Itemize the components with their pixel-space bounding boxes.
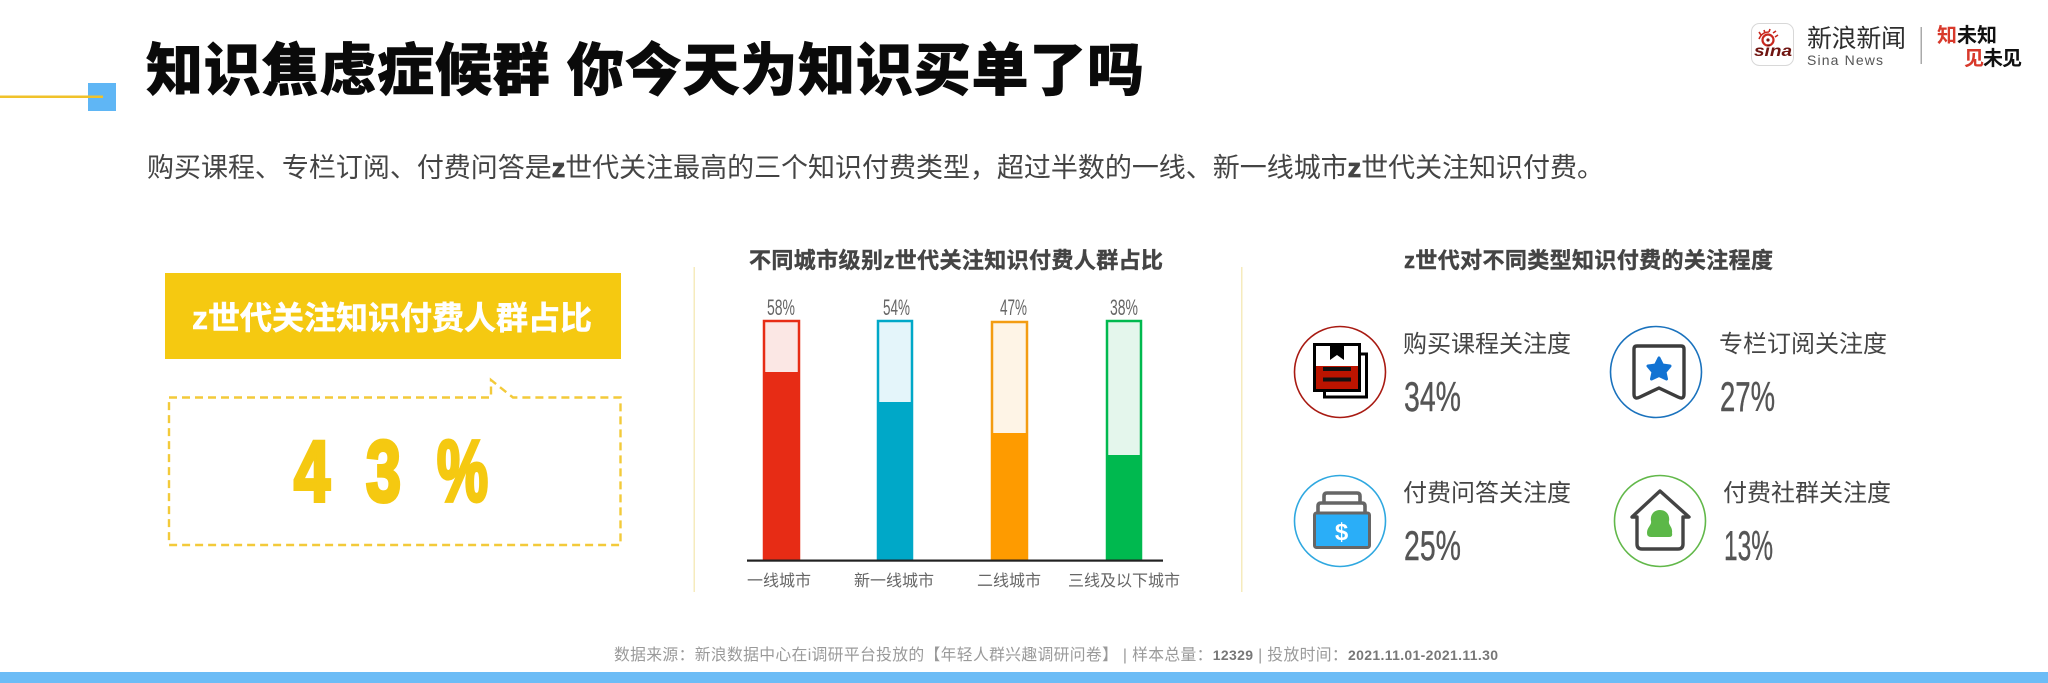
icon: sina app logo: sina [1754,43,1792,60]
header accent: blue square and yellow line [0,83,116,111]
item: courses 34%: 购买课程关注度 [1403,331,1571,358]
item: columns 27%: 专栏订阅关注度 [1719,331,1887,358]
item: paid Q&A 25% [1294,476,1571,569]
item: paid Q&A 25%: 付费问答关注度 [1403,480,1571,507]
icon: book stack [1294,326,1386,418]
brand english name: Sina News [1807,52,1883,68]
bar: tier three and below 38%: 三线及以下城市 [1068,572,1180,590]
bar: new tier one 54%: 54% [883,295,910,320]
heading banner: z世代关注知识付费人群占比 [192,300,592,336]
bar: tier two 47% [977,295,1041,590]
panel heading: z世代对不同类型知识付费的关注程度 [1404,248,1773,273]
subtitle text: 购买课程、专栏订阅、付费问答是z世代关注最高的三个知识付费类型，超过半数的一线、新一线城市z世代关注知识付费。 [147,153,1604,183]
logo: Sina News and slogan [1752,24,2022,70]
big number 43% [294,424,488,520]
bar: tier one 58% [747,295,811,590]
big number 43%: 4 [294,424,330,520]
slogan: 见未见 [1964,47,2022,70]
item: paid community 13%: 付费社群关注度 [1723,480,1891,507]
icon: sina app logo [1752,24,1794,66]
icon: bookmark star [1610,326,1702,418]
item: courses 34% [1294,326,1571,420]
bar: new tier one 54% [854,295,934,590]
bar: new tier one 54%: 新一线城市 [854,572,934,590]
slogan [1937,24,2022,70]
chart heading: 不同城市级别z世代关注知识付费人群占比 [749,248,1163,273]
heading banner [165,273,621,359]
icon: dollar card stack [1294,476,1386,566]
bar: tier three and below 38%: 38% [1110,295,1138,320]
icon: dollar card stack: $ [1335,519,1349,546]
panel: city tier bar chart [747,248,1180,590]
bottom blue band [0,672,2048,683]
panel: attention by type [1294,248,1891,569]
item: courses 34%: 34% [1404,373,1461,420]
bar: tier one 58%: 58% [767,295,795,320]
bar: tier two 47%: 47% [1000,295,1027,320]
item: columns 27% [1610,326,1887,420]
item: paid community 13% [1614,476,1891,569]
bar: tier two 47%: 二线城市 [977,572,1041,590]
dashed callout box [169,380,620,545]
bar: tier three and below 38% [1068,295,1180,590]
title: 知识焦虑症候群 你今天为知识买单了吗 [146,39,1144,103]
item: columns 27%: 27% [1720,373,1775,420]
source footnote: 数据来源：新浪数据中心在i调研平台投放的【年轻人群兴趣调研问卷】 | 样本总量：12329 | 投放时间：2021.11.01-2021.11.30 [614,646,1498,664]
item: paid community 13%: 13% [1724,522,1773,569]
panel: overall share [165,273,621,545]
big number 43%: % [437,424,488,520]
item: paid Q&A 25%: 25% [1404,522,1461,569]
bar: tier one 58%: 一线城市 [747,572,811,590]
slogan: 知未知 [1937,24,1997,47]
big number 43%: 3 [366,424,401,520]
brand name: 新浪新闻 [1807,25,1906,53]
icon: house with person [1614,476,1706,566]
